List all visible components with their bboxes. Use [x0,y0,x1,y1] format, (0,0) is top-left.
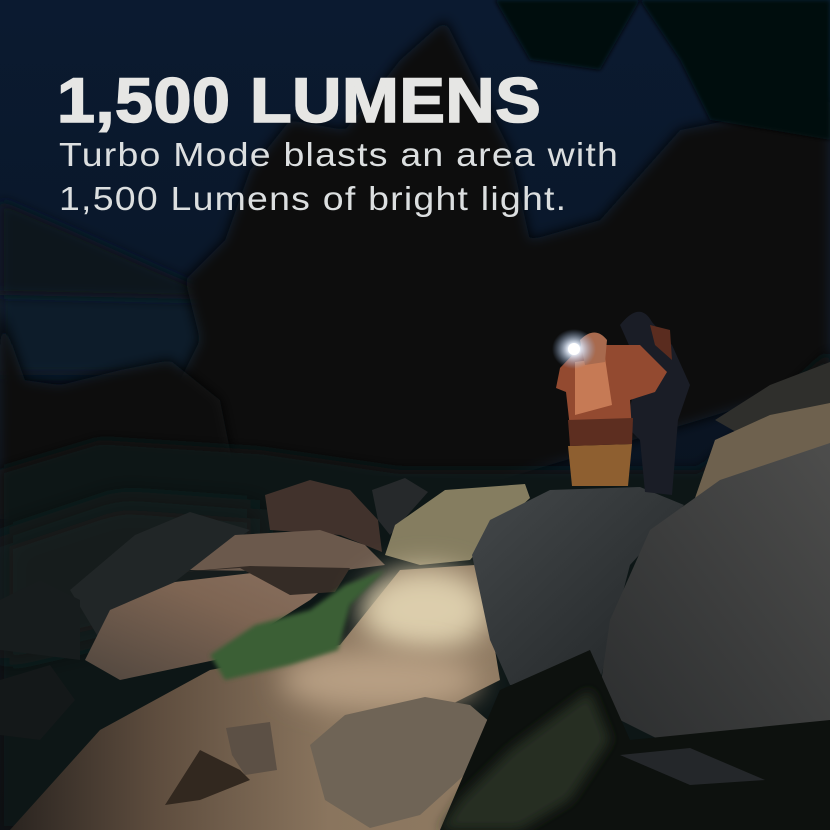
front hiker [556,345,667,430]
sunlit ground [10,565,500,830]
hikers [552,312,690,495]
foreground rocks [165,697,505,828]
description text [59,137,619,218]
rear hiker [620,312,690,495]
mid rocks [0,478,530,740]
grass patch [210,570,385,680]
description text: 1,500 Lumens of bright light. [59,181,567,218]
dark tree silhouettes [0,0,830,520]
upper right boulders [695,362,830,498]
large right boulders [440,443,830,830]
dark hillside [0,350,830,830]
title: 1,500 LUMENS [57,66,541,136]
description text: Turbo Mode blasts an area with [59,137,619,174]
